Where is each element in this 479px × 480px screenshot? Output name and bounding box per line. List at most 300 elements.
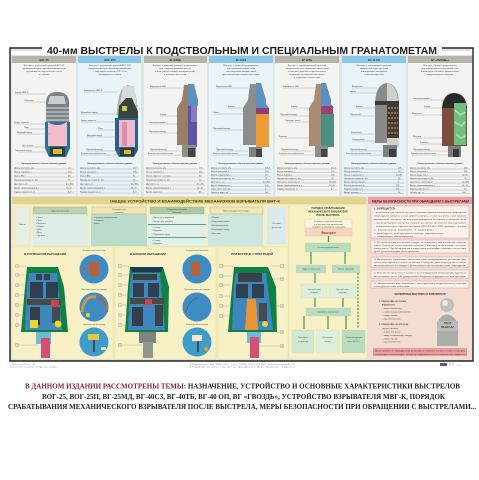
table: Gvozd data: Масса вещества, г — [410, 174, 428, 176]
table: VOG-25 data: 48 — [68, 176, 71, 178]
table: VOG-25 data: 76 — [68, 180, 71, 182]
icon: fuze in combat — [125, 267, 169, 358]
table: fuze mechanisms: ▪ Винт — [36, 220, 42, 222]
table: VG-40 OP data: Время срабатывания, с — [344, 182, 367, 184]
panel: VG-40TB: предназначен для поражения живой силы — [286, 67, 329, 70]
table: VOG-25P data: 122 — [133, 168, 137, 170]
panel: VG-40SZ: Выстрел с гранатой предназначен — [224, 64, 259, 67]
panel: VG-40TB: Выстрел с термобарической гранатой — [288, 64, 327, 67]
table: Gvozd data: Конструктивные и баллистические данные — [418, 162, 463, 165]
table: VOG-25 data: Начальная скорость, м/с — [14, 180, 38, 182]
panel: VG Gvozd: Корпус — [424, 106, 431, 108]
marking list: – номер партии; — [382, 338, 398, 340]
panel: VG-40 OP: Капсюль-воспламенитель — [346, 153, 371, 155]
table: fuze mechanisms: механизм — [172, 212, 182, 214]
panel: VOG-25: Корпус ВМГ-К — [15, 92, 29, 94]
table: VG-40 OP data: 101 — [398, 168, 402, 170]
warning note — [373, 348, 467, 356]
table: fuze mechanisms: ▪ Воспламенитель — [211, 225, 229, 227]
panel: VG-40SZ: Смесь — [213, 112, 219, 114]
table: Gvozd data: 180 — [464, 171, 468, 173]
table: VG-40MD data: Масса пиротехн. состава, г — [146, 176, 172, 178]
callout numbers: in service: 3 — [16, 285, 18, 287]
table: VOG-25P data: Масса выстрела, г — [80, 172, 98, 174]
marking list: – индекс выстрела; — [382, 332, 401, 334]
table: Gvozd data: Радиус действия, м — [410, 188, 430, 190]
icon: VG-40 OP shell — [375, 83, 399, 157]
footer imprint: Издательство. Москва, тел. (495) 000-00-00, www.example.ru — [190, 364, 295, 366]
table: fuze mechanisms: ▪ Капсюль — [211, 233, 221, 235]
panel: VG-40MD: Взрыватель ВМГ — [150, 86, 167, 88]
callout numbers: in service: 5 — [16, 305, 18, 307]
safety box 1: – разбирать и вскрывать корпус взрывателя; — [374, 233, 445, 235]
table: VG-40SZ data: 76 — [265, 178, 268, 180]
table: VG-40TB data: Время самоликвидации, с — [277, 185, 302, 187]
table: VOG-25P data: Время самоликвидации, с — [80, 188, 105, 190]
marking list: – марка взрывателя; — [382, 308, 402, 310]
callout numbers: in combat — [118, 264, 143, 347]
summary text: ВОГ-25, ВОГ-25П, ВГ-25МД, ВГ-40СЗ, ВГ-40ТБ, ВГ-40 ОП, ВГ «ГВОЗДЬ», УСТРОЙСТВО ВЗРЫВАТЕЛЯ МВГ-К, ПОРЯДОК — [42, 393, 445, 401]
panel: VG-40SZ: Корпус — [228, 106, 235, 108]
panel: VG-40SZ: ВГ-40СЗ — [236, 58, 247, 62]
table: Gvozd data: 14–19 — [462, 185, 469, 187]
flow: box labels — [298, 247, 362, 343]
panel: VG-40TB: Корпус — [291, 106, 298, 108]
panel: VG-40MD: Пороховой заряд — [149, 130, 166, 133]
flow: box labels: При действии — [308, 288, 320, 291]
table: VOG-25P data: 37 — [133, 176, 136, 178]
table: fuze mechanisms: механизм — [114, 212, 124, 214]
table: VG-40MD data: 123 — [199, 168, 203, 170]
table: fuze mechanisms: ▪ Винт — [94, 223, 100, 225]
flow: shot box: Выстрел — [321, 231, 336, 235]
footer imprint: © Издательство, Москва, 2011 — [10, 363, 35, 366]
table: VG-40SZ data: 121,5 — [265, 168, 271, 170]
safety box 2: для утилизации выстрелов. — [374, 251, 421, 253]
summary text — [8, 382, 476, 411]
panel: VOG-25P: Пороховой заряд — [86, 148, 103, 151]
panel: VG Gvozd: в замкнутых объёмах с применением — [421, 71, 460, 73]
table: VG-40TB data: 50–400 — [329, 182, 337, 184]
panel: VG Gvozd: раздражающего вещества — [427, 74, 454, 76]
icon: marked grenade: 56-007-87 — [441, 325, 454, 329]
table: VOG-25P data: 40–400 — [131, 184, 139, 186]
panel: VG-40SZ: Пороховой заряд — [213, 127, 230, 130]
panel: VOG-25: ВОГ-25 — [39, 58, 49, 62]
panel: VOG-25: предназначен для поражения живой силы — [23, 67, 66, 70]
panel: VG Gvozd: Капсюль-воспламенитель — [411, 153, 436, 155]
flow: box labels: через 14–19 с — [347, 341, 360, 343]
callout numbers: in service: 1 — [16, 266, 18, 268]
table: fuze mechanisms: ▪ Пружина — [152, 243, 163, 245]
panel: VG-40MD: Пороховой заряд — [150, 148, 167, 151]
table: Gvozd data: 50–55 — [462, 174, 469, 176]
panel: VG-40 OP: в тактическую зону — [364, 74, 385, 76]
panel: VG Gvozd: Вещество — [412, 113, 422, 115]
table: VG-40MD data: 14–19 — [197, 188, 204, 190]
panel: VG Gvozd: ВГ «ГВОЗДЬ» — [431, 58, 449, 62]
table: fuze mechanisms: ▪ Пружина — [152, 230, 163, 232]
marking list — [379, 301, 413, 344]
panel: VG Gvozd: Выстрел «Гвоздь» предназначен — [423, 65, 457, 67]
panel: VOG-25P: Пояс — [98, 128, 103, 130]
panel: VG-40 OP: Пороховой — [350, 113, 361, 116]
icon: VG-40SZ shell — [243, 83, 269, 157]
panel: in service handling: Механизм дальнего взвода — [81, 289, 108, 291]
panel: VOG-25: Дно гильзы — [22, 145, 33, 147]
panel: VG Gvozd: Капсюль — [420, 142, 428, 144]
safety box 5 — [371, 281, 469, 288]
table: Gvozd data: 100 — [462, 192, 466, 194]
panel: VG-40 OP: Вышибной — [352, 85, 363, 88]
table: VG-40MD data: Конструктивные и баллистические данные — [153, 162, 198, 165]
table: VG-40MD data: 60 — [199, 176, 202, 178]
table: fuze mechanisms: ▪ Пружина — [36, 223, 47, 225]
table: fuze mechanisms: ▪ Пружина — [94, 220, 105, 222]
panel: VOG-25: Пороховой заряд — [15, 149, 32, 152]
panel: VG-40TB: ВГ-40ТБ — [302, 58, 312, 62]
table: VG-40TB data: 14–19 — [329, 185, 336, 187]
icon: fuze in service — [21, 267, 68, 358]
table: fuze mechanisms: ▪ Втулка — [211, 217, 220, 219]
title: 40-мм ВЫСТРЕЛЫ К ПОДСТВОЛЬНЫМ И СПЕЦИАЛЬНЫМ ГРАНАТОМЕТАМ — [47, 45, 437, 57]
table: VG-40SZ data: Начальная скорость, м/с — [211, 178, 235, 180]
flow: box labels: При действии — [336, 288, 349, 291]
icon: VG-40MD shell — [177, 84, 198, 157]
table: VG-40 OP data: Высота раскрытия, м — [344, 185, 365, 187]
panel: on impact — [218, 247, 288, 359]
table: fuze mechanisms: ▪ Ударник — [36, 235, 45, 237]
table: VG-40TB data: 76 — [331, 178, 334, 180]
callout numbers: in combat: 7 — [120, 325, 121, 327]
warning note: Выстрелы в заводской упаковке имеют многоступенчатую — [375, 350, 466, 352]
table: VG-40SZ data: Время замедления, с — [211, 185, 232, 187]
safety box 1: – использовать для стрельбы выстрелы, имеющие видимые механические повреждения — [374, 212, 466, 214]
table: Gvozd data: 126 — [464, 168, 468, 170]
panel: VG-40 OP: агитационного материала — [361, 71, 388, 73]
panel: VG-40MD — [144, 56, 207, 196]
marking list: 1. Маркировка на головке — [379, 301, 407, 303]
safety box 5: 5. Металлические коробки с выстрелами вскрываются только — [374, 283, 467, 285]
panel: VG-40SZ — [209, 56, 273, 196]
panel: VG Gvozd: Пороховой заряд — [413, 148, 430, 151]
table: VOG-25 data: Длина выстрела, мм — [14, 168, 34, 170]
table: VG-40SZ data — [211, 162, 271, 194]
table: VOG-25P data: 278 — [133, 172, 137, 174]
panel: firing order flowchart: ПОРЯДОК СРАБАТЫВАНИЯ — [312, 207, 345, 210]
panel: VG-40TB: в полевых укрытиях и при опасности — [288, 71, 327, 73]
callout numbers: on impact: 2 — [220, 276, 222, 278]
table: VG-40 OP data — [344, 162, 404, 194]
panel: VOG-25P: ВОГ-25П — [105, 58, 116, 62]
table: VG-40MD data — [146, 162, 205, 194]
table: VG-40 OP data: 76 — [398, 178, 401, 180]
icon: marked grenade: ТМ-27 — [444, 321, 452, 325]
table: fuze mechanisms: ▪ Фиксатор с пружиной — [152, 216, 175, 219]
table: VG-40SZ data: 210 — [265, 171, 269, 173]
table: VOG-25P data: Дальность, м — [80, 184, 93, 186]
table: fuze mechanisms: ▪ Мост — [36, 232, 42, 234]
table: VOG-25 data: 250 — [68, 172, 72, 174]
flow: box labels: Детонация — [323, 337, 332, 339]
callout numbers: on impact: 3 — [220, 285, 222, 287]
icon: fuze on impact — [228, 267, 277, 358]
table: fuze mechanisms: Инерционный — [113, 208, 125, 211]
icon: Gvozd shell — [442, 93, 467, 157]
panel: VG-40TB: Пороховой заряд — [281, 148, 298, 151]
panel: VG-40MD: Пиротехнический — [149, 121, 167, 124]
panel: VG-40TB: Капсюль-воспламенитель — [279, 153, 304, 155]
table: VG-40SZ data: 50–400 — [263, 182, 271, 184]
table: VOG-25 data: 112 — [68, 168, 72, 170]
table: VG-40 OP data: 217 — [398, 171, 402, 173]
table: VG-40 OP data: Масса снаряжения, г — [344, 174, 364, 176]
table: fuze mechanisms: ▪ Корпус дет. капсюля — [152, 221, 173, 223]
table: Gvozd data: Объём, куб. м — [410, 192, 424, 194]
flow: box labels: Снятие предохранения — [317, 247, 339, 249]
heading: general fuze device: ОБЩЕЕ УСТРОЙСТВО И ВЗАИМОДЕЙСТВИЕ МЕХАНИЗМОВ ВЗРЫВАТЕЛЯ ВМГ-К — [110, 200, 281, 204]
table: VG-40TB data: Конструктивные и баллистические данные — [285, 162, 330, 165]
table: VG-40MD data: 260 — [199, 172, 203, 174]
table: VG-40TB data: 270 — [331, 171, 335, 173]
table: VOG-25P data — [80, 162, 139, 194]
table: VG-40TB data: 105 — [331, 174, 335, 176]
panel: VG-40SZ: для поражения живой силы — [227, 67, 255, 70]
panel: VOG-25P: Кумул. воронка — [81, 120, 97, 122]
panel: VOG-25 — [12, 56, 76, 196]
table: VG-40MD data: Время горения, с — [146, 192, 163, 194]
table: VG-40SZ data: 3–6 — [265, 185, 269, 187]
table: VG-40TB data: Начальная скорость, м/с — [277, 178, 301, 180]
panel: VOG-25: Кумул. воронка — [14, 122, 30, 124]
safety box 1: 1. ЗАПРЕЩАЕТСЯ: — [374, 208, 396, 210]
table: VG-40SZ data: Длина выстрела, мм — [211, 168, 231, 170]
flow: box labels: Инерц. механизм — [338, 268, 355, 270]
callout numbers: on impact: 9 — [282, 266, 283, 268]
table: VG-40 OP data: 200 — [396, 185, 400, 187]
safety box 1: маркировкой, выстрелы, не имеющие маркировки на корпусе и головной части — [374, 218, 467, 221]
panel: in combat position: Фиксаторный механизм — [186, 323, 209, 326]
flow: shot box: В процессе хранения выстрел — [314, 221, 343, 223]
safety box 1 — [371, 206, 469, 238]
panel: VG-40MD: Корпус — [160, 114, 167, 116]
panel: VG-40MD: Капсюль-воспламенитель — [148, 153, 173, 155]
table: VOG-25P data: Длина выстрела, мм — [80, 168, 100, 170]
table: VG-40TB data: Масса заряда, г — [277, 174, 293, 176]
table: VOG-25 data: 6–9 — [68, 192, 72, 194]
flow: green boxes — [292, 243, 365, 353]
table: fuze mechanisms: ▪ Пороховая трубка — [211, 221, 231, 223]
panel: VG-40TB: Зарядная часть — [285, 120, 300, 122]
panel: VG-40 OP: Корпус — [356, 106, 363, 108]
panel: firing order flowchart — [289, 205, 367, 359]
table: VG-40MD data: Масса выстрела, г — [146, 172, 164, 174]
marking list: корпусе гранаты: — [382, 328, 399, 330]
table: fuze mechanisms: ▪ Втулка — [36, 226, 45, 228]
table: VG-40SZ data: Конструктивные и баллистические данные — [219, 162, 264, 165]
table: VG-40MD data: Начальная скорость, м/с — [146, 180, 170, 182]
table: VG-40 OP data: Время горения, с — [344, 192, 361, 194]
callout numbers: on impact: 5 — [220, 306, 222, 308]
footer imprint: Плакат — [456, 365, 463, 367]
table: VG-40TB data: 121,5 — [331, 168, 337, 170]
marking list: – номер завода-изготовителя; — [382, 312, 411, 314]
panel: VG-40MD: Выстрел с дымовой гранатой предназначен — [153, 64, 198, 67]
panel: VOG-25: Выстрел с осколочной гранатой ВОГ-25 — [24, 64, 65, 67]
table: VOG-25 data: Конструктивные и баллистические данные — [22, 162, 67, 165]
panel: VOG-25: противника на открытой местности — [26, 70, 63, 73]
table: Gvozd data: 76 — [464, 178, 467, 180]
panel: VG-40 OP: ВГ-40 ОП — [368, 58, 380, 62]
panel: VG Gvozd: Пиротехнический — [413, 97, 431, 100]
panel: VG-40 OP: Замедлитель — [352, 139, 365, 141]
table: VG-40SZ data: Масса снаряжения, г — [211, 174, 231, 176]
flow: box labels: нагрузок — [339, 292, 347, 294]
table: VOG-25P data: 76 — [133, 180, 136, 182]
footer imprint — [10, 362, 463, 368]
table: fuze mechanisms: Предохранительный — [167, 208, 187, 211]
panel: VG-40SZ: Пороховой заряд — [216, 148, 233, 151]
panel: firing order flowchart: ПОСЛЕ ВЫСТРЕЛА — [317, 214, 340, 217]
table: VOG-25 data: 40–400 — [66, 184, 74, 186]
callout numbers: in combat: 5 — [120, 305, 121, 307]
table: VG-40MD data: 60 — [199, 192, 202, 194]
callout numbers: on impact: 12 — [281, 332, 283, 334]
flow: shot box: находится в безопасном состоянии — [312, 227, 345, 229]
panel: VG-40TB: Пороховой заряд — [280, 113, 297, 116]
flow: arrows — [304, 236, 358, 329]
panel: VG-40 OP: Выстрел с агитационной гранатой — [357, 64, 392, 67]
table: VG-40SZ data: Сила света, млн. кд — [211, 188, 231, 190]
table: VOG-25P data: Масса ВВ, г — [80, 176, 92, 178]
callout numbers: in service — [15, 264, 38, 347]
table: VG-40 OP data: Радиус разброса, м — [344, 188, 364, 190]
panel: VG Gvozd — [408, 56, 472, 196]
callout numbers: in service: 2 — [16, 275, 18, 277]
footer imprint: Учебный плакат в комплекте с методическим пособием — [10, 366, 57, 368]
callout numbers: in service: 6 — [16, 315, 18, 317]
safety box 1: с высоты более 1 метра; — [374, 230, 435, 232]
callout numbers: on impact — [219, 264, 284, 348]
panel: VOG-25: и в окопах — [39, 74, 50, 76]
table: VG-40TB data: Длина выстрела, мм — [277, 168, 297, 170]
panel: VG-40TB: Взрыватель ВМГ — [283, 86, 300, 88]
callout numbers: in combat: 8 — [120, 345, 121, 347]
flow: box labels: нагрузок — [310, 292, 318, 294]
panel: VG-40SZ: при выполнении специальных задач — [222, 74, 260, 76]
safety box 1: повреждения, трещины и иные дефекты корпуса, а также выстрелы с неисправной — [374, 214, 467, 218]
table: VG-40SZ data: Дальность, м — [211, 182, 224, 184]
marking list: – номер партии; — [382, 315, 398, 317]
callout numbers: in service: 7 — [16, 325, 18, 327]
panel: VOG-25P — [78, 56, 141, 196]
panel: firing order flowchart: МЕХАНИЧЕСКОГО ВЗРЫВАТЕЛЯ — [308, 210, 348, 214]
table: VOG-25P data: Радиус поражения, м — [80, 192, 101, 194]
panel: VG-40 OP — [342, 56, 406, 196]
table: VG-40 OP data: 100 — [396, 188, 400, 190]
panel: on impact: ПРИ ВСТРЕЧЕ С ПРЕГРАДОЙ — [231, 252, 273, 256]
callout numbers: in combat: 6 — [120, 315, 121, 317]
table: VG-40TB data: Радиус поражения, м — [277, 188, 298, 190]
table: VG-40MD data: Дальность, м — [146, 184, 159, 186]
panel: in combat position — [115, 247, 216, 359]
panel: VOG-25P: с подскоком на высоту 0,5–1,5 м — [93, 71, 127, 73]
summary text: В ДАННОМ ИЗДАНИИ РАССМОТРЕНЫ ТЕМЫ: НАЗНАЧЕНИЕ, УСТРОЙСТВО И ОСНОВНЫЕ ХАРАКТЕРИСТИКИ ВЫСТРЕЛОВ — [25, 382, 460, 390]
table: fuze mechanisms: детонатор — [272, 227, 282, 229]
marking list: 2. Маркировка на оболочке, — [379, 324, 409, 326]
table: VG-40MD data: Время самоликвидации, с — [146, 188, 171, 190]
panel: VG-40TB: и в укрытиях лёгкого типа — [294, 77, 321, 79]
panel: VG-40TB: поражения на открытой местности — [289, 73, 325, 76]
panel: VG-40MD: ВГ-40МД — [169, 58, 181, 62]
panel: VG-40 OP: заряд — [350, 91, 356, 93]
flow: shot box: с установленным взрывателем — [314, 224, 344, 226]
panel: VOG-25P: Ведущий заряд — [87, 134, 103, 137]
table: VG-40 OP data: 60 — [398, 192, 401, 194]
table: VG-40 OP data: Конструктивные и баллистические данные — [352, 162, 397, 165]
footer imprint: Подписано в печать, формат А1. Заказ. Тираж — [190, 366, 297, 368]
panel: VOG-25P: Выстрел с осколочной гранатой ВОГ-25П — [89, 64, 131, 67]
flow: box labels: При ударе — [298, 337, 309, 339]
panel: VOG-25P: Взрыватель ВМГ-К — [84, 90, 103, 92]
table: fuze mechanisms: ▪ Диск — [36, 229, 42, 231]
panel: safety measures — [368, 197, 472, 359]
warning note: предохранительную защиту взрывателя в надежных ящиках — [375, 354, 466, 356]
safety box 1: – использовать для стрельбы выстрелы (ВОГ-25, ВОГ-25П), упавшие с высоты — [374, 226, 467, 228]
flow: box labels: Взведение взрывателя — [317, 312, 339, 314]
icon: inset circles 2 — [182, 254, 212, 356]
icon: VOG-25 shell — [45, 92, 70, 157]
table: VOG-25P data: 6–9 — [133, 192, 137, 194]
poster frame — [10, 48, 473, 361]
panel: in service handling: В СЛУЖЕБНОМ ОБРАЩЕНИИ — [24, 252, 66, 256]
table: VG-40SZ data: Уровень звука, дБ — [211, 192, 229, 194]
panel: VOG-25P: предназначен для поражения живой силы — [89, 67, 132, 70]
table: Gvozd data: Дальность стрельбы, м — [410, 182, 433, 184]
panel: in combat position: В БОЕВОМ ОБРАЩЕНИИ — [130, 252, 166, 256]
table: VG-40 OP data: Длина выстрела, мм — [344, 168, 364, 170]
table: Gvozd data: 10 — [464, 188, 467, 190]
safety box 4 — [371, 270, 469, 278]
panel: VG-40TB — [275, 56, 339, 196]
table: VG-40SZ data: 140 — [265, 192, 269, 194]
table: fuze mechanisms: ▪ Стопор — [152, 240, 161, 242]
callout numbers: on impact: 4 — [220, 296, 222, 298]
safety box 1: – нарушать блокировку. — [374, 236, 415, 238]
table: VG-40 OP data: Масса выстрела, г — [344, 171, 362, 173]
table: Gvozd data — [410, 162, 470, 194]
table: Gvozd data: Длина выстрела, мм — [410, 168, 430, 170]
flow: box labels: заряда — [324, 341, 332, 343]
panel: VOG-25P: Вышибной заряд — [81, 111, 98, 114]
panel: VG-40MD: для создания дымовой завесы — [159, 67, 191, 70]
table: fuze mechanisms: ▪ Пороховой заряд — [152, 233, 171, 236]
table: VG-40SZ data: Масса выстрела, г — [211, 171, 229, 173]
table: VOG-25 data: Радиус поражения, м — [14, 192, 35, 194]
table: Gvozd data: Время самоликвидации, с — [410, 185, 435, 187]
safety box 2 — [371, 240, 469, 253]
safety box 3: транспортировке с высоты более 2 метров, при перегрузке нельзя — [374, 262, 466, 264]
callout numbers: on impact: 11 — [281, 306, 283, 308]
safety box 5: специальным ключом. — [374, 286, 411, 288]
table: VOG-25P data: 14–19 — [131, 188, 138, 190]
panel: VG-40MD: в условиях местности — [164, 74, 187, 76]
panel: VOG-25P: Капсюль-воспламенитель — [81, 153, 106, 155]
panel: VG-40SZ: светозвуковым воздействием — [226, 70, 256, 73]
callout numbers: in service: 8 — [16, 345, 18, 347]
panel: in service handling: Фиксаторный механизм — [83, 323, 106, 326]
panel: in combat position: Инерционный механизм — [186, 249, 209, 252]
